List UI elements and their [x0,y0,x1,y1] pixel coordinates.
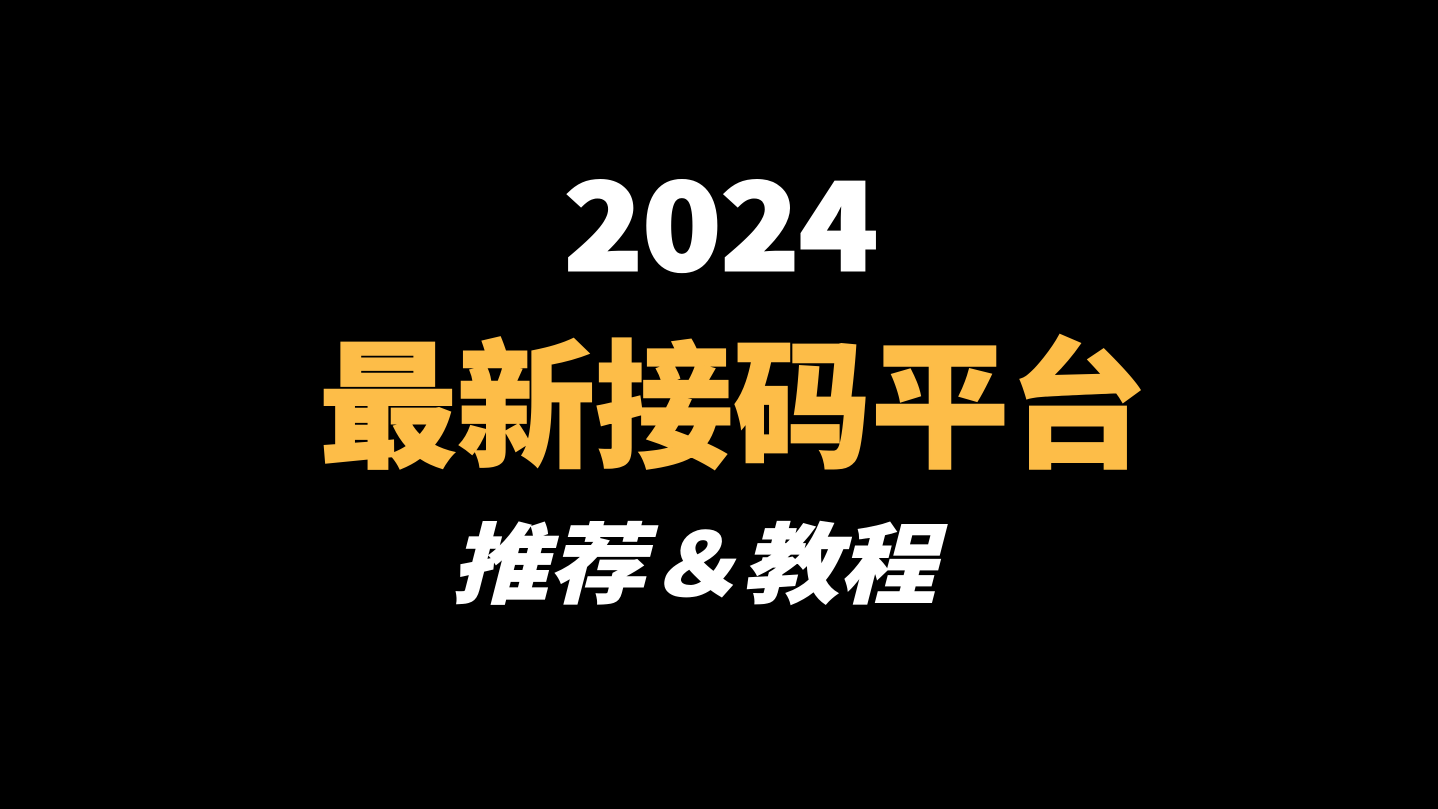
subtitle: 推荐＆教程 [446,518,956,615]
year heading: 2024 [564,133,878,304]
main title: 最新接码平台 [319,332,1147,486]
